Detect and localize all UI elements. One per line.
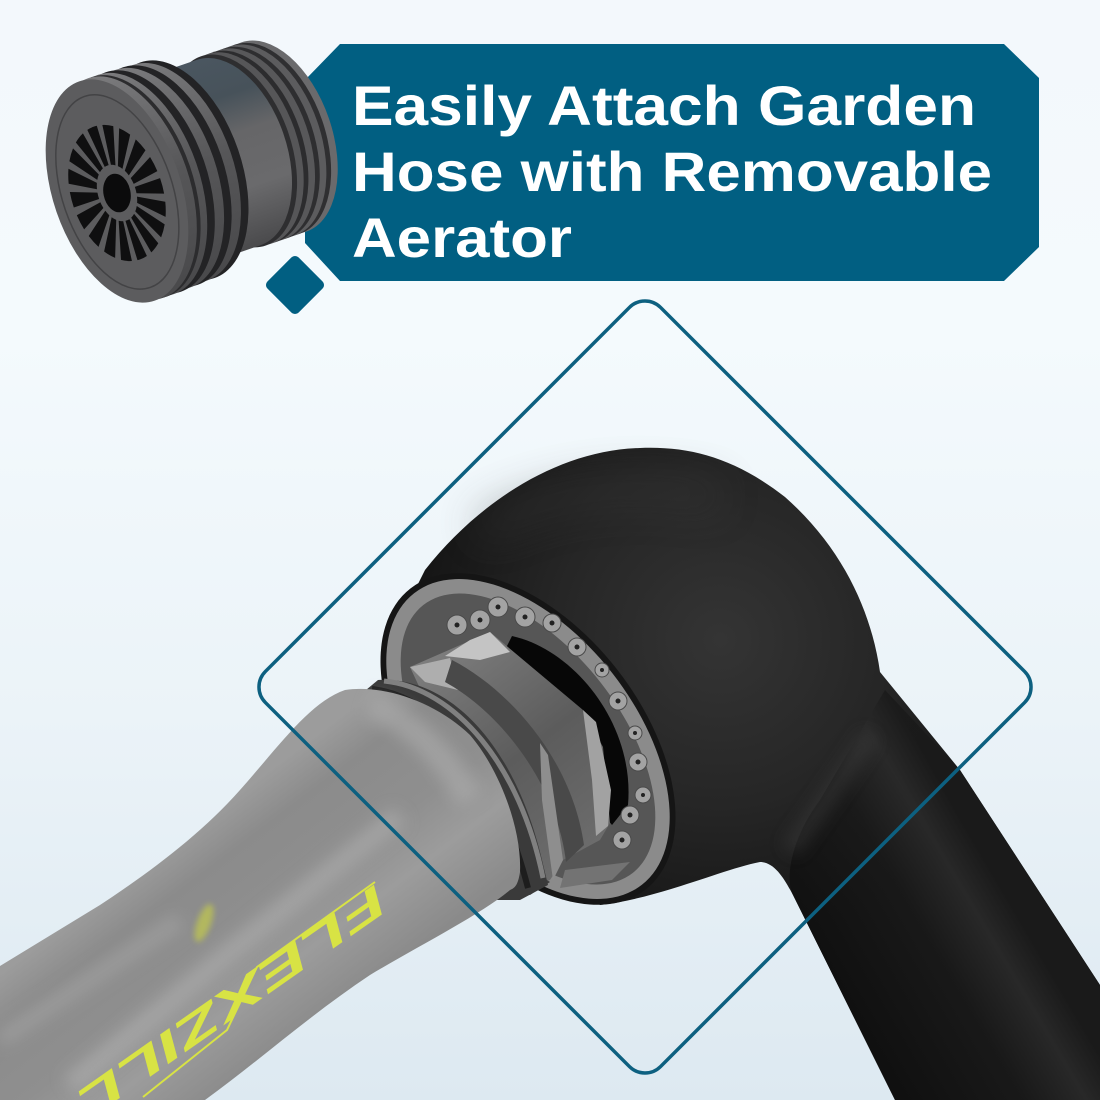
nozzle dots (447, 597, 651, 849)
black inner gap (505, 636, 629, 825)
front ribs (80, 42, 275, 299)
nozzle holes (454, 604, 645, 842)
heading text: Easily Attach Garden (352, 74, 976, 137)
arm shading (790, 690, 1100, 1100)
rear thread (187, 24, 361, 250)
aerator face (19, 60, 215, 322)
garden hose (0, 689, 520, 1100)
centre hole (98, 169, 136, 217)
hose and faucet photo (0, 448, 1100, 1100)
radial slots (70, 136, 164, 250)
heading text: Aerator (352, 206, 572, 269)
hex nut (410, 632, 630, 895)
hose collar (360, 680, 548, 900)
waist (137, 41, 315, 266)
small accent diamond (264, 254, 326, 316)
diamond outline frame (250, 292, 1040, 1082)
heading banner (305, 44, 1039, 281)
icon: removable aerator (19, 8, 367, 322)
faucet head and arm (400, 448, 1100, 1100)
brand swoosh line (143, 882, 375, 1097)
aerator ring (380, 578, 676, 905)
hose highlights (370, 705, 470, 800)
brand lettering smudge (192, 902, 216, 944)
aerator body in tilted frame (19, 8, 367, 322)
heading text: Hose with Removable (352, 140, 992, 203)
brand lettering: FLEXZILL (68, 877, 397, 1100)
banner shape (305, 44, 1039, 281)
